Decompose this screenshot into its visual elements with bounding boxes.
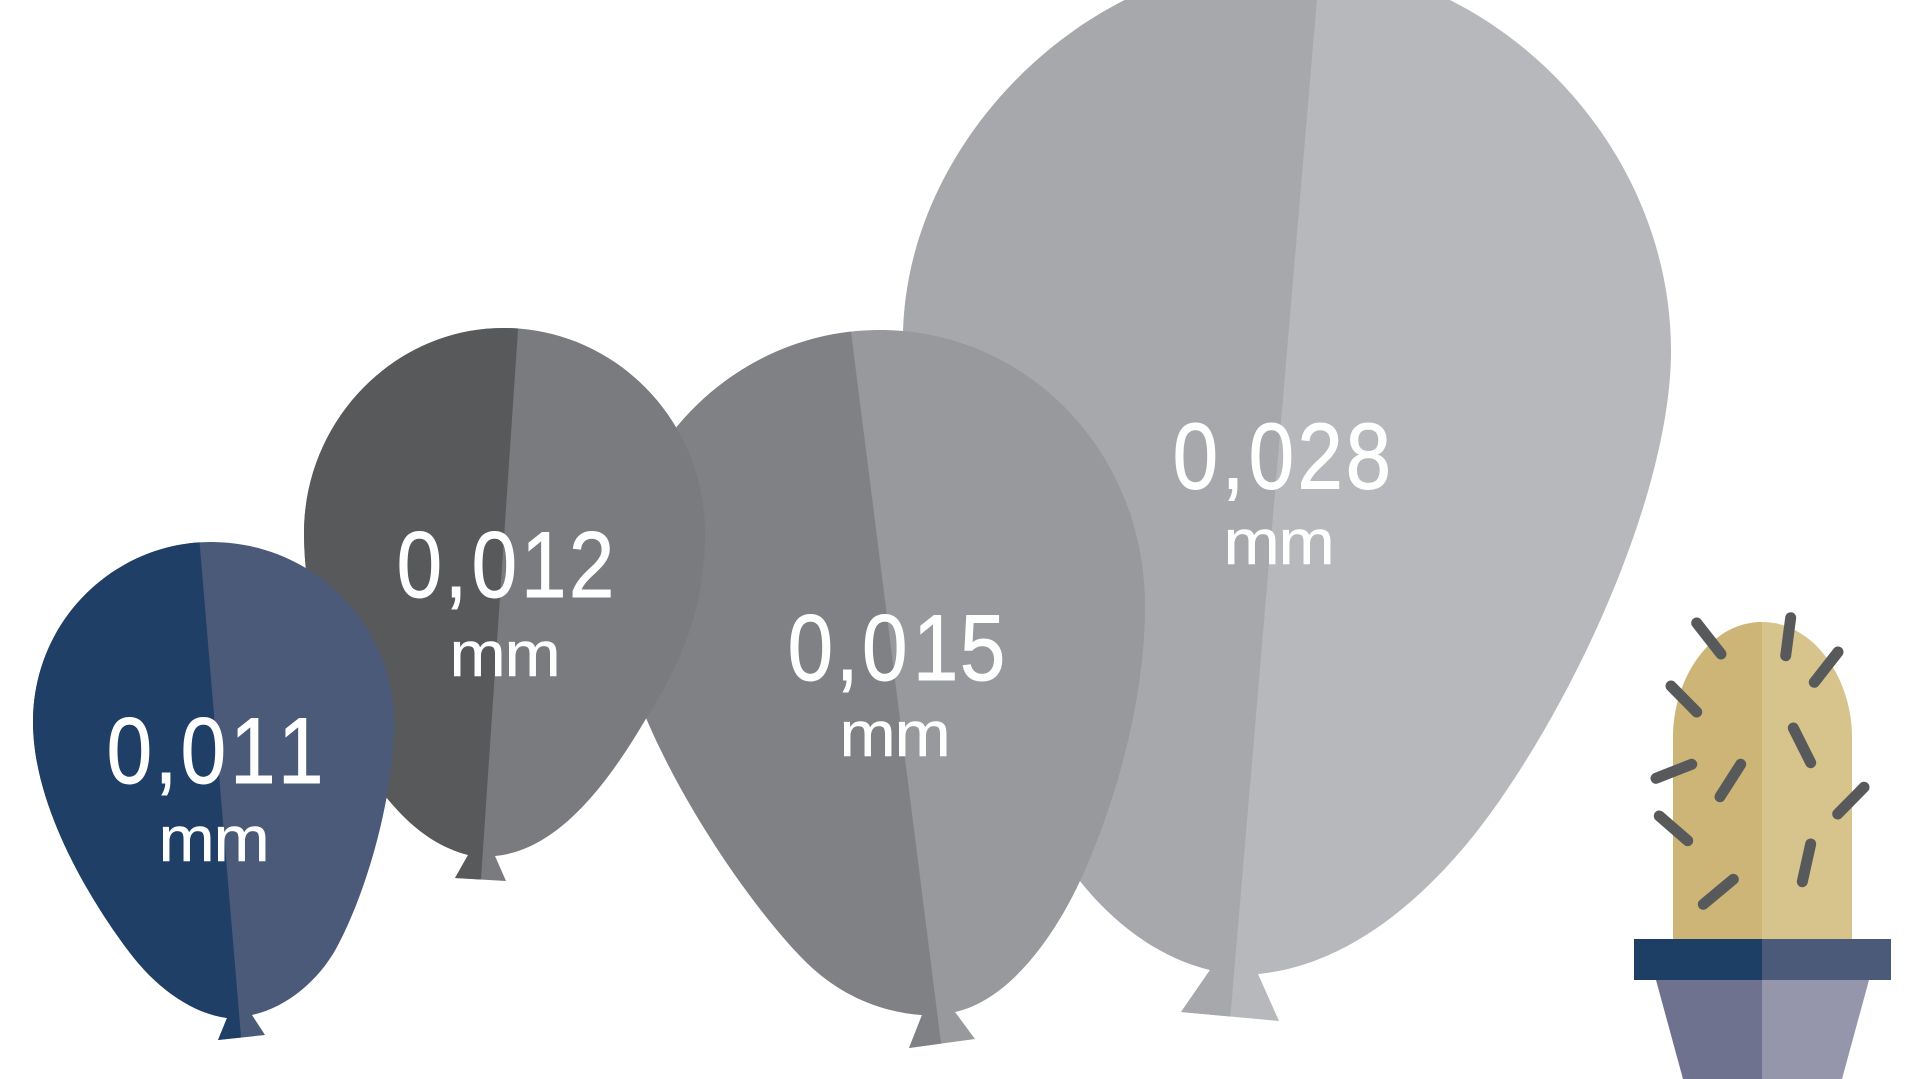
cactus body [1673, 622, 1852, 940]
label: 0,028 mm: 0,028 [1173, 403, 1391, 509]
icon: cactus in pot [1634, 618, 1891, 1079]
balloon: 0,012 mm [304, 328, 705, 881]
label: 0,015 mm: 0,015 [788, 595, 1005, 700]
label: 0,015 mm: mm [840, 698, 951, 770]
label: 0,012 mm: mm [450, 618, 561, 690]
label: 0,015 mm [788, 595, 1005, 770]
pot base [1656, 980, 1869, 1079]
balloon: 0,015 mm [615, 330, 1145, 1048]
label: 0,028 mm [1173, 403, 1391, 578]
balloon: 0,028 mm [903, 0, 1671, 1021]
label: 0,011 mm: mm [159, 803, 270, 875]
label: 0,011 mm [107, 698, 323, 875]
label: 0,028 mm: mm [1224, 506, 1335, 578]
label: 0,011 mm: 0,011 [107, 698, 323, 803]
cactus spines [1656, 618, 1864, 904]
label: 0,012 mm: 0,012 [397, 512, 614, 617]
label: 0,012 mm [397, 512, 614, 690]
balloon: 0,011 mm [33, 542, 394, 1040]
pot rim [1634, 939, 1891, 980]
